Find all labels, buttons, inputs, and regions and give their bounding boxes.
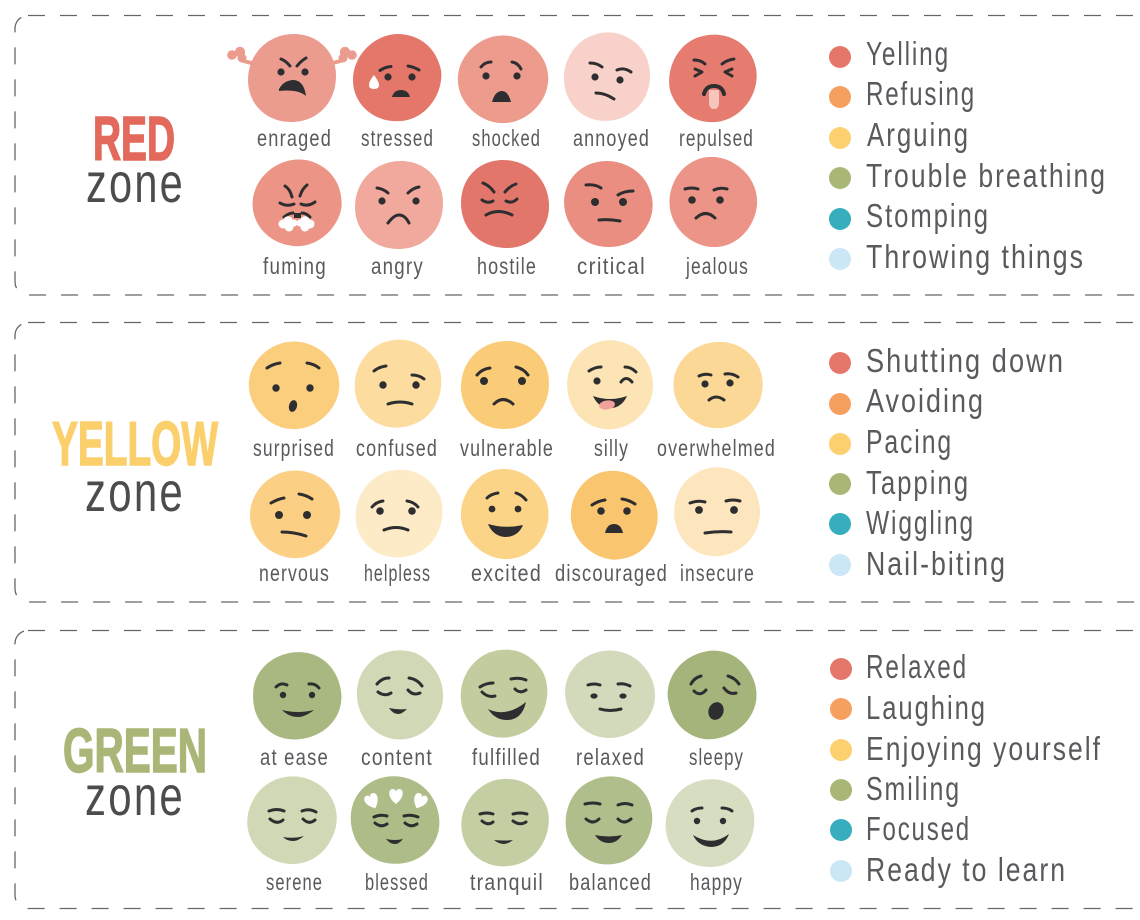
face: shocked xyxy=(441,17,565,151)
face: discouraged: discouraged xyxy=(555,560,668,586)
face: silly xyxy=(548,323,672,461)
face: helpless: helpless xyxy=(364,560,431,586)
face: serene xyxy=(236,764,348,895)
legend item: Wiggling xyxy=(829,504,975,541)
face: critical xyxy=(549,144,668,279)
legend item: Focused xyxy=(830,810,971,847)
face: silly: silly xyxy=(594,435,629,461)
face: serene: serene xyxy=(266,869,323,895)
face: content xyxy=(340,635,460,770)
face: happy: happy xyxy=(690,869,743,895)
face: enraged xyxy=(227,34,357,151)
face: jealous: jealous xyxy=(685,253,749,279)
legend item: Stomping xyxy=(829,197,990,234)
face: overwhelmed xyxy=(657,325,778,461)
face: excited xyxy=(445,454,565,586)
legend item: Yelling: Yelling xyxy=(866,35,950,72)
face: vulnerable xyxy=(460,341,554,461)
legend item: Pacing: Pacing xyxy=(866,423,953,460)
face: content: content xyxy=(361,744,433,770)
legend item: Laughing: Laughing xyxy=(866,689,987,726)
face: sleepy: sleepy xyxy=(689,744,744,770)
face: balanced: balanced xyxy=(569,869,652,895)
face: repulsed xyxy=(662,28,764,151)
legend item: Relaxed: Relaxed xyxy=(866,648,968,685)
face: fuming xyxy=(243,149,351,279)
legend item: Nail-biting xyxy=(829,545,1007,582)
face: annoyed xyxy=(547,17,667,151)
face: excited: excited xyxy=(471,560,542,586)
face: enraged: enraged xyxy=(257,125,332,151)
legend: yellow zone behaviours xyxy=(829,342,1065,582)
legend: red zone behaviours xyxy=(829,35,1107,275)
legend item: Stomping: Stomping xyxy=(866,197,990,234)
face: sleepy xyxy=(661,644,763,770)
heading: GREEN zone xyxy=(63,717,207,827)
face: blessed xyxy=(344,769,446,895)
face: insecure xyxy=(655,450,779,586)
face: confused: confused xyxy=(356,435,438,461)
legend item: Nail-biting: Nail-biting xyxy=(866,545,1007,582)
face: overwhelmed: overwhelmed xyxy=(657,435,776,461)
legend item: Refusing: Refusing xyxy=(866,75,976,112)
face: annoyed: annoyed xyxy=(573,125,650,151)
face: surprised: surprised xyxy=(253,435,335,461)
face: relaxed: relaxed xyxy=(576,744,645,770)
heading: RED zone xyxy=(86,105,185,214)
face: tranquil xyxy=(454,772,556,895)
legend item: Smiling xyxy=(830,770,961,807)
panel: yellow zone xyxy=(15,322,1140,602)
face: angry: angry xyxy=(371,253,424,279)
legend item: Ready to learn: Ready to learn xyxy=(866,851,1067,888)
face: tranquil: tranquil xyxy=(470,869,544,895)
face: shocked: shocked xyxy=(472,125,541,151)
legend item: Avoiding: Avoiding xyxy=(866,382,985,419)
face: happy xyxy=(659,772,761,895)
face: critical: critical xyxy=(577,253,646,279)
heading: GREEN zone: zone xyxy=(85,764,185,827)
face: hostile xyxy=(461,160,549,279)
legend item: Tapping xyxy=(829,464,970,501)
heading: GREEN zone: GREEN xyxy=(63,717,207,786)
heading: RED zone: RED xyxy=(93,105,175,174)
legend item: Tapping: Tapping xyxy=(866,464,970,501)
face: balanced xyxy=(553,764,665,895)
legend item: Avoiding xyxy=(829,382,985,419)
face: stressed: stressed xyxy=(361,125,434,151)
legend: green zone behaviours xyxy=(830,648,1102,888)
face: jealous xyxy=(653,142,773,279)
legend item: Arguing: Arguing xyxy=(867,116,970,153)
heading: YELLOW zone: zone xyxy=(85,460,185,523)
panel: green zone xyxy=(15,630,1140,908)
face: insecure: insecure xyxy=(680,560,755,586)
face: blessed: blessed xyxy=(365,869,429,895)
face: surprised xyxy=(232,323,356,461)
face: discouraged xyxy=(555,464,668,586)
legend item: Arguing xyxy=(829,116,970,153)
face: confused xyxy=(342,327,454,461)
face: nervous xyxy=(235,454,355,586)
legend item: Yelling xyxy=(829,35,950,72)
face: angry xyxy=(355,161,443,279)
face: at ease xyxy=(249,648,345,770)
face: stressed xyxy=(353,34,441,151)
panel: red zone xyxy=(15,16,1140,295)
legend item: Laughing xyxy=(830,689,987,726)
heading: YELLOW zone: YELLOW xyxy=(52,410,218,479)
face: at ease: at ease xyxy=(260,744,329,770)
face: helpless xyxy=(345,460,453,586)
legend item: Refusing xyxy=(829,75,976,112)
face: hostile: hostile xyxy=(477,253,537,279)
legend item: Focused: Focused xyxy=(866,810,971,847)
face: fulfilled xyxy=(448,637,560,770)
face: fuming: fuming xyxy=(263,253,327,279)
legend item: Relaxed xyxy=(830,648,968,685)
legend item: Wiggling: Wiggling xyxy=(866,504,975,541)
legend item: Shutting down: Shutting down xyxy=(866,342,1065,379)
face: fulfilled: fulfilled xyxy=(472,744,541,770)
face: repulsed: repulsed xyxy=(679,125,754,151)
legend item: Throwing things: Throwing things xyxy=(866,238,1085,275)
heading: RED zone: zone xyxy=(86,151,185,214)
face: nervous: nervous xyxy=(259,560,330,586)
face: relaxed xyxy=(550,634,670,770)
face: vulnerable: vulnerable xyxy=(460,435,554,461)
heading: YELLOW zone xyxy=(52,410,218,523)
legend item: Smiling: Smiling xyxy=(866,770,961,807)
legend item: Pacing xyxy=(829,423,953,460)
